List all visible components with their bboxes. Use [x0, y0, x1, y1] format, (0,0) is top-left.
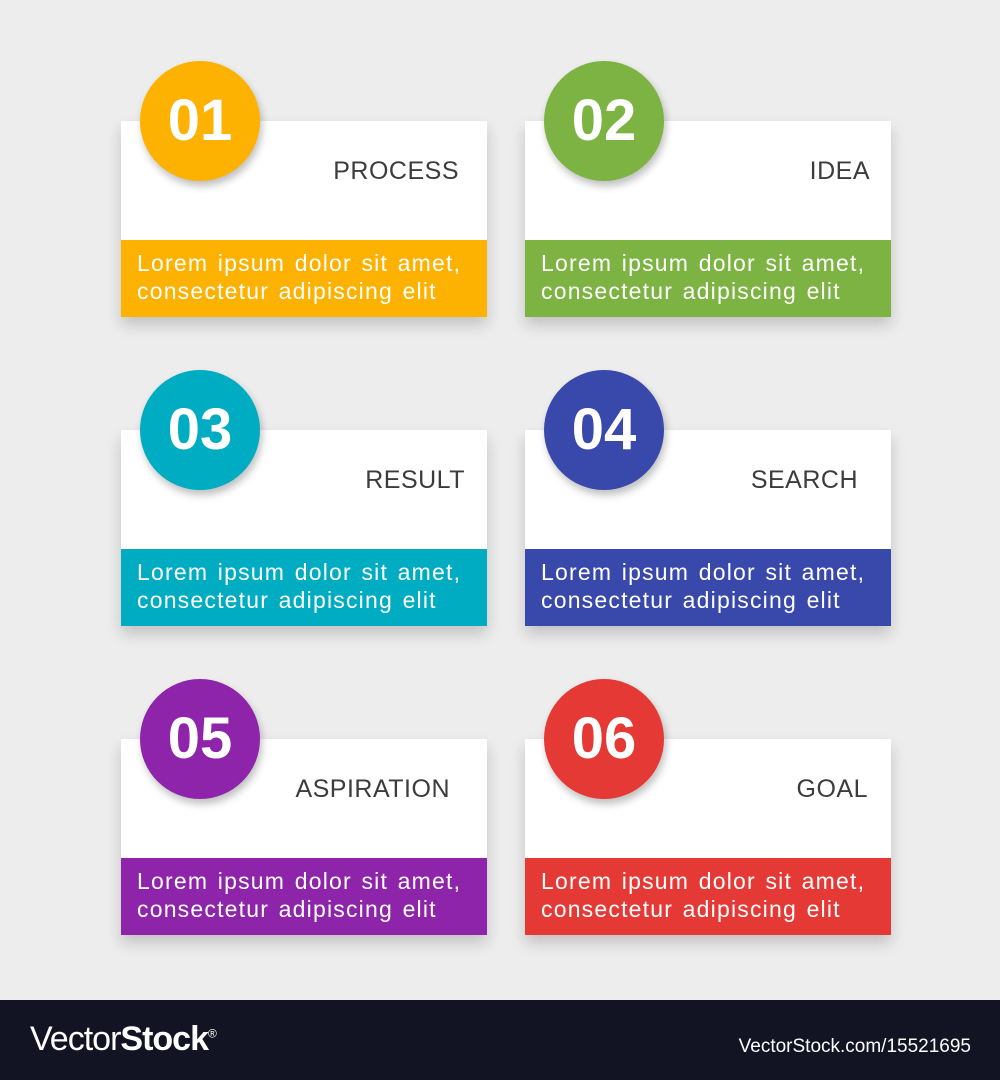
circle 05: [140, 679, 260, 799]
circle 05: 05: [168, 706, 232, 771]
band text 02: [525, 240, 891, 317]
band text 05: Lorem ipsum dolor sit amet,: [137, 868, 461, 894]
logo: VectorStock®: [30, 1020, 216, 1058]
band text 01: consectetur adipiscing elit: [137, 278, 437, 304]
band text 06: Lorem ipsum dolor sit amet,: [541, 868, 865, 894]
card 04: [525, 430, 891, 626]
footer: [0, 1000, 1000, 1080]
band text 04: consectetur adipiscing elit: [541, 587, 841, 613]
band text 03: [121, 549, 487, 626]
card 05: [121, 739, 487, 935]
band text 01: Lorem ipsum dolor sit amet,: [137, 250, 461, 276]
band text 03: Lorem ipsum dolor sit amet,: [137, 559, 461, 585]
footer url: VectorStock.com/15521695: [739, 1036, 971, 1057]
circle 03: [140, 370, 260, 490]
circle 02: 02: [572, 88, 636, 153]
circle 02: [544, 61, 664, 181]
title: RESULT: RESULT: [365, 466, 465, 494]
title: PROCESS: PROCESS: [333, 157, 459, 185]
title: ASPIRATION: ASPIRATION: [295, 775, 450, 803]
circle 06: [544, 679, 664, 799]
card 03: [121, 430, 487, 626]
circle 01: 01: [168, 88, 232, 153]
circle 01: [140, 61, 260, 181]
title: SEARCH: SEARCH: [751, 466, 858, 494]
circle 04: [544, 370, 664, 490]
circle 04: 04: [572, 397, 636, 462]
circle 06: 06: [572, 706, 636, 771]
card 01: [121, 121, 487, 317]
circle 03: 03: [168, 397, 232, 462]
band text 04: [525, 549, 891, 626]
band text 01: [121, 240, 487, 317]
title: GOAL: GOAL: [797, 775, 868, 803]
card 06: [525, 739, 891, 935]
title: IDEA: IDEA: [810, 157, 870, 185]
band text 04: Lorem ipsum dolor sit amet,: [541, 559, 865, 585]
band text 06: consectetur adipiscing elit: [541, 896, 841, 922]
card 02: [525, 121, 891, 317]
band text 02: Lorem ipsum dolor sit amet,: [541, 250, 865, 276]
band text 05: consectetur adipiscing elit: [137, 896, 437, 922]
band text 03: consectetur adipiscing elit: [137, 587, 437, 613]
band text 06: [525, 858, 891, 935]
band text 05: [121, 858, 487, 935]
band text 02: consectetur adipiscing elit: [541, 278, 841, 304]
